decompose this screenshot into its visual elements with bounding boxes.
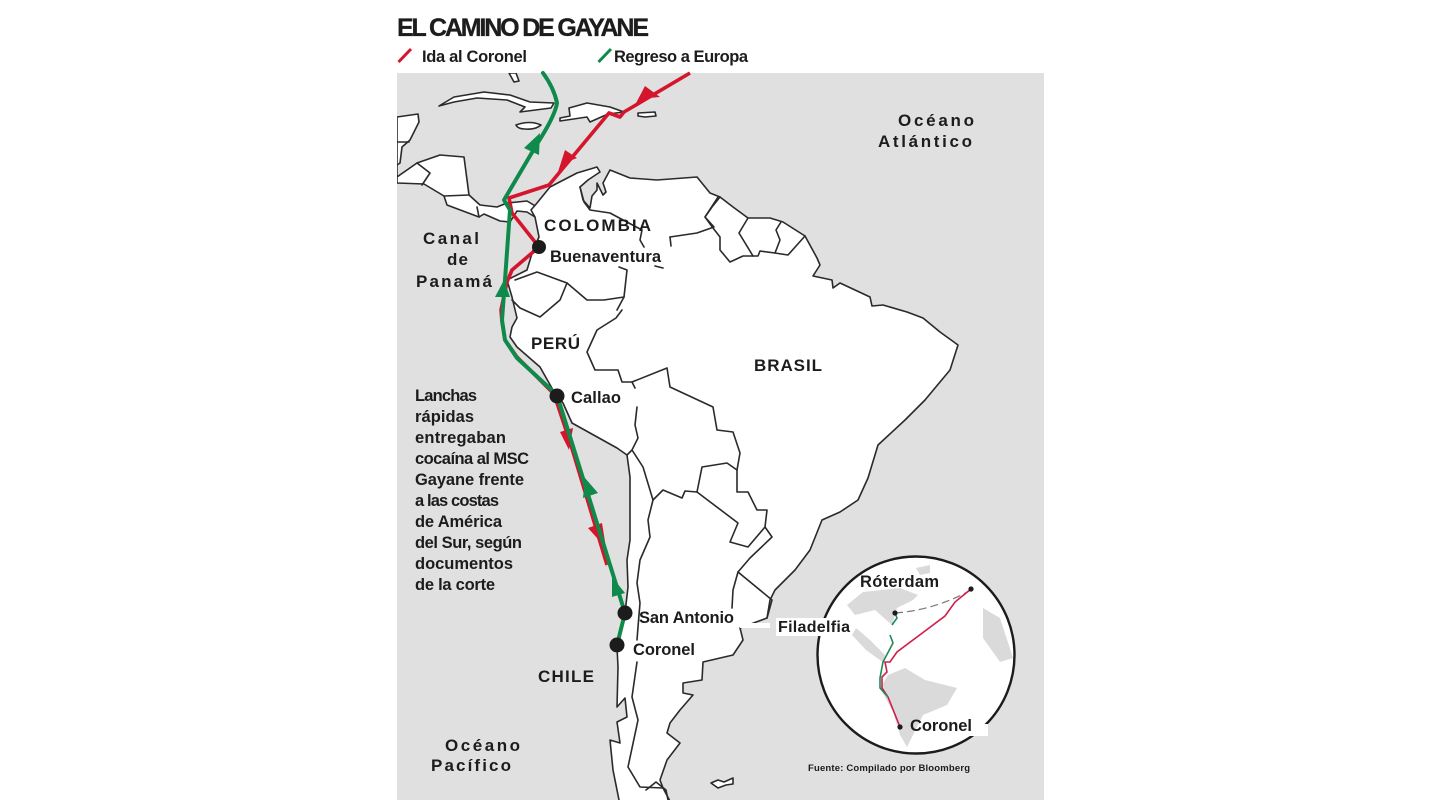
label: Colombia: COLOMBIA [544,216,651,235]
panel: map [397,73,1044,805]
route: return to Europe [495,73,625,645]
label: Filadelfia: Filadelfia [778,619,850,636]
label: Perú: PERÚ [531,334,580,353]
globe: land [847,565,1013,747]
legend: outbound route: Ida al Coronel [422,48,527,66]
text block: speedboats note: de América [415,513,503,531]
land: Mexico and Central America [397,114,537,222]
label: Chile: CHILE [538,667,594,686]
text block: speedboats note [415,387,529,594]
arrowhead: green Panama [495,280,510,297]
route: outbound to Coronel [501,73,690,565]
land masses [397,73,958,805]
text block: speedboats note: del Sur, según [415,534,522,552]
title: EL CAMINO DE GAYANE [397,14,649,42]
arrowhead: green Chile north [583,478,598,498]
label: Océano Pacífico: Océano [445,736,520,755]
label: Canal de Panamá [416,229,493,291]
legend: return route: Regreso a Europa [614,48,749,66]
port: San Antonio: San Antonio [639,609,734,627]
port: Buenaventura: Buenaventura [550,248,662,266]
port: Callao [550,388,621,407]
arrowhead: red Peru coast [560,428,573,450]
label: Canal de Panamá: Panamá [416,272,493,291]
text block: speedboats note: entregaban [415,429,506,447]
globe: red route [882,589,971,727]
globe: Filadelfia dot [892,610,898,616]
text block: speedboats note: de la corte [415,576,495,594]
port: Callao: Callao [571,389,621,407]
label: Océano Atlántico: Océano [898,111,974,130]
arrowhead: red Chile coast [588,523,606,548]
arrowhead: red Caribbean [557,150,577,175]
port: Coronel: Coronel [633,641,695,659]
port: Buenaventura [532,240,662,266]
inset: globe [776,556,1014,754]
text block: speedboats note: cocaína al MSC [415,450,529,468]
arrowhead: green Chile south [612,577,625,597]
label: Océano Pacífico: Pacífico [431,756,511,775]
label: Canal de Panamá: de [447,250,468,269]
mask behind Filadelfia label [740,623,770,628]
label: Róterdam: Róterdam [860,573,939,591]
globe: green route [880,613,897,697]
label: Brasil: BRASIL [754,356,822,375]
label: Océano Pacífico [431,736,520,775]
text block: speedboats note: Gayane frente [415,471,524,489]
land: Caribbean islands [439,73,656,129]
text block: speedboats note: Lanchas [415,387,477,405]
land: Falkland Islands [711,778,733,788]
legend [398,48,749,66]
arrowhead: red north [635,86,660,105]
label: Coronel: Coronel [910,717,972,735]
globe: Coronel dot [897,724,903,730]
land: South America [507,167,958,805]
port: San Antonio [618,606,734,627]
label: Océano Atlántico: Atlántico [878,132,972,151]
text block: speedboats note: documentos [415,555,513,573]
globe: dashed link [895,590,971,613]
label: Canal de Panamá: Canal [423,229,479,248]
national borders [512,187,805,800]
label: Océano Atlántico [878,111,974,151]
text block: speedboats note: rápidas [415,408,474,426]
text block: speedboats note: a las costas [415,492,499,510]
arrowhead: green Caribbean [524,133,540,155]
globe: Róterdam dot [968,586,974,592]
port: Coronel [610,638,695,659]
source note: Fuente: Compilado por Bloomberg [808,763,970,774]
Central America borders [397,142,479,217]
